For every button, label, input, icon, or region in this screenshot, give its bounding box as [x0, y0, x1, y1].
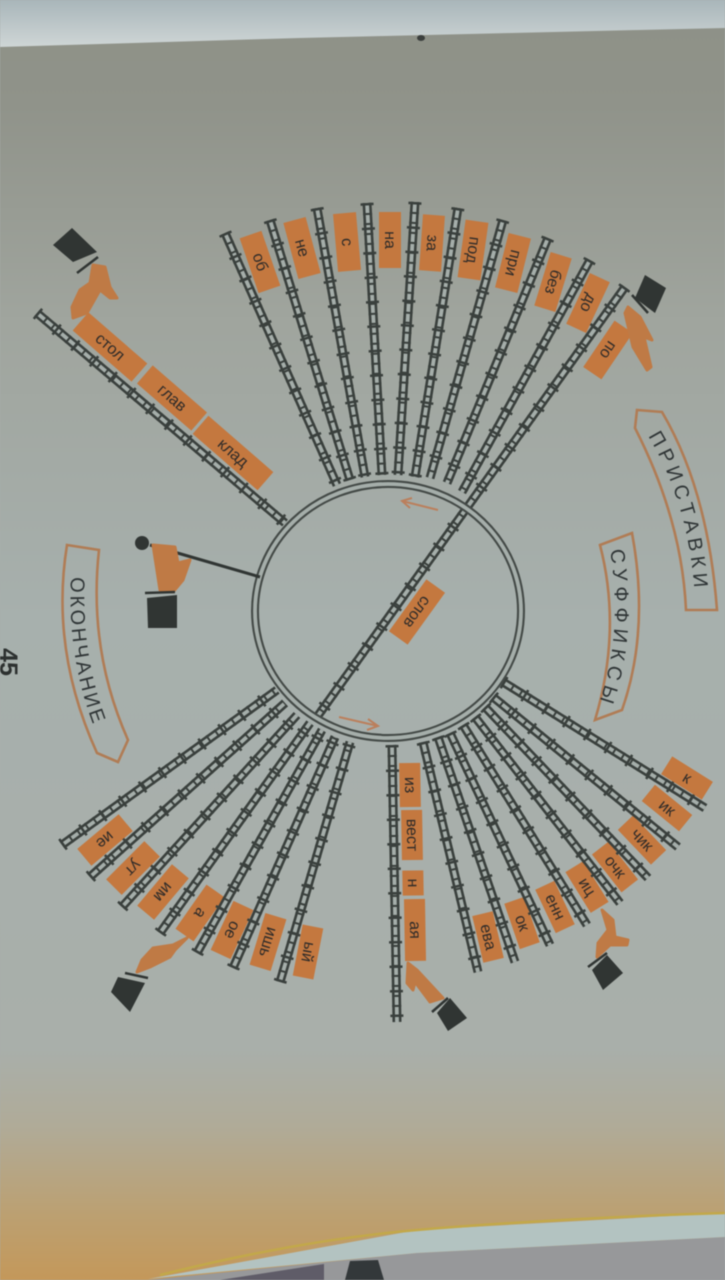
track: из вест н ая rail	[392, 745, 397, 1022]
icon: hand lower middle	[407, 963, 467, 1031]
ribbon: СУФФИКСЫ	[592, 531, 641, 722]
ribbon: ПРИСТАВКИ	[633, 408, 719, 612]
track with block: об: об	[249, 251, 271, 273]
block: стол: стол	[92, 330, 128, 365]
block: вест	[401, 810, 423, 860]
block: глав: глав	[154, 381, 189, 415]
ribbon: СУФФИКСЫ: СУФФИКСЫ	[600, 549, 630, 704]
track with block: ева: ева	[476, 922, 499, 952]
track with block: не: не	[291, 237, 312, 259]
track with block: ок: ок	[511, 913, 532, 934]
panel: endings	[62, 690, 350, 982]
yellow page edge	[160, 1213, 725, 1275]
panel: suffixes	[392, 682, 713, 1022]
track with block: на	[367, 203, 401, 475]
track with block: ик: ик	[655, 797, 679, 821]
top light band	[0, 0, 725, 47]
track with block: ок	[438, 737, 540, 962]
track with block: очк: очк	[601, 853, 629, 883]
track with block: ый	[280, 742, 350, 982]
track with block: за	[398, 202, 445, 475]
central ring	[255, 484, 521, 738]
track with block: за: за	[422, 234, 441, 252]
track with block: ут: ут	[121, 856, 144, 880]
block: клад	[193, 416, 273, 490]
ribbon: ОКОНЧАНИЕ: ОКОНЧАНИЕ	[70, 578, 106, 724]
track with block: чик: чик	[627, 826, 657, 856]
block: вест: вест	[403, 819, 420, 852]
track with block: без	[447, 238, 572, 483]
track with block: к	[503, 682, 713, 808]
track with block: под: под	[462, 236, 483, 265]
speck on page edge	[417, 35, 425, 41]
arrow: top in circle	[402, 498, 438, 510]
block: клад: клад	[214, 436, 252, 472]
track with block: при: при	[501, 248, 524, 278]
block: из: из	[401, 777, 418, 793]
panel: prefixes	[225, 202, 633, 717]
track with block: на: на	[381, 231, 398, 249]
track with block: ие	[62, 690, 277, 866]
track with block: ый: ый	[297, 940, 318, 964]
track with block: ишь	[233, 737, 335, 971]
track with block: ишь: ишь	[255, 925, 280, 959]
ribbon: ПРИСТАВКИ: ПРИСТАВКИ	[648, 430, 708, 587]
track with block: а: а	[190, 904, 209, 921]
track with block: ик	[493, 697, 692, 847]
track with block: ут	[90, 703, 285, 895]
track with block: об	[225, 231, 337, 485]
track with block: до: до	[576, 291, 599, 315]
track with block: ева	[423, 742, 504, 972]
icon: hand with handle	[135, 536, 260, 628]
icon: hand lower left	[111, 938, 187, 1012]
track with block: им: им	[150, 879, 176, 905]
block: глав	[137, 365, 207, 431]
track with block: до	[462, 260, 610, 492]
track: root rail	[37, 313, 285, 523]
block: н: н	[404, 878, 421, 888]
panel: roots	[37, 312, 285, 523]
track with block: енн: енн	[541, 892, 568, 923]
track with block: ое: ое	[220, 918, 243, 942]
block: стол	[73, 312, 147, 382]
track with block: иц	[463, 725, 609, 925]
icon: hand top right	[625, 275, 666, 370]
track with block: чик	[485, 707, 666, 878]
block: ая	[404, 899, 426, 961]
bottom background behind the page	[148, 1237, 725, 1280]
track with block: иц: иц	[575, 875, 599, 899]
track with block: им	[122, 715, 297, 920]
track with block: с: с	[338, 237, 355, 247]
track with block: к: к	[679, 769, 695, 788]
block: н	[402, 870, 424, 896]
track with block: очк	[475, 717, 638, 903]
block: ая: ая	[406, 921, 423, 939]
track with block: без: без	[541, 267, 564, 296]
bottom patterned object	[220, 1264, 324, 1280]
ribbon: ОКОНЧАНИЕ	[60, 543, 130, 764]
bottom white page strip	[148, 1213, 725, 1279]
track with block: енн	[450, 733, 575, 945]
icon: hand lower right	[588, 910, 628, 990]
track with block: при	[430, 220, 531, 478]
track with block: по: по	[596, 338, 620, 362]
track with block: с	[317, 208, 365, 477]
track with block: по	[317, 287, 633, 717]
track with block: ие: ие	[92, 827, 117, 852]
track with block: под	[415, 208, 488, 477]
track with block: ое	[197, 730, 322, 959]
arrow: bottom in circle	[339, 717, 378, 730]
track with block: не	[270, 217, 350, 480]
block: слов: слов	[399, 593, 434, 631]
dark object at the bottom	[345, 1260, 384, 1280]
icon: hand top left	[53, 228, 117, 318]
block: слов	[389, 579, 445, 645]
track with block: а	[160, 723, 310, 941]
block: из	[399, 763, 421, 807]
